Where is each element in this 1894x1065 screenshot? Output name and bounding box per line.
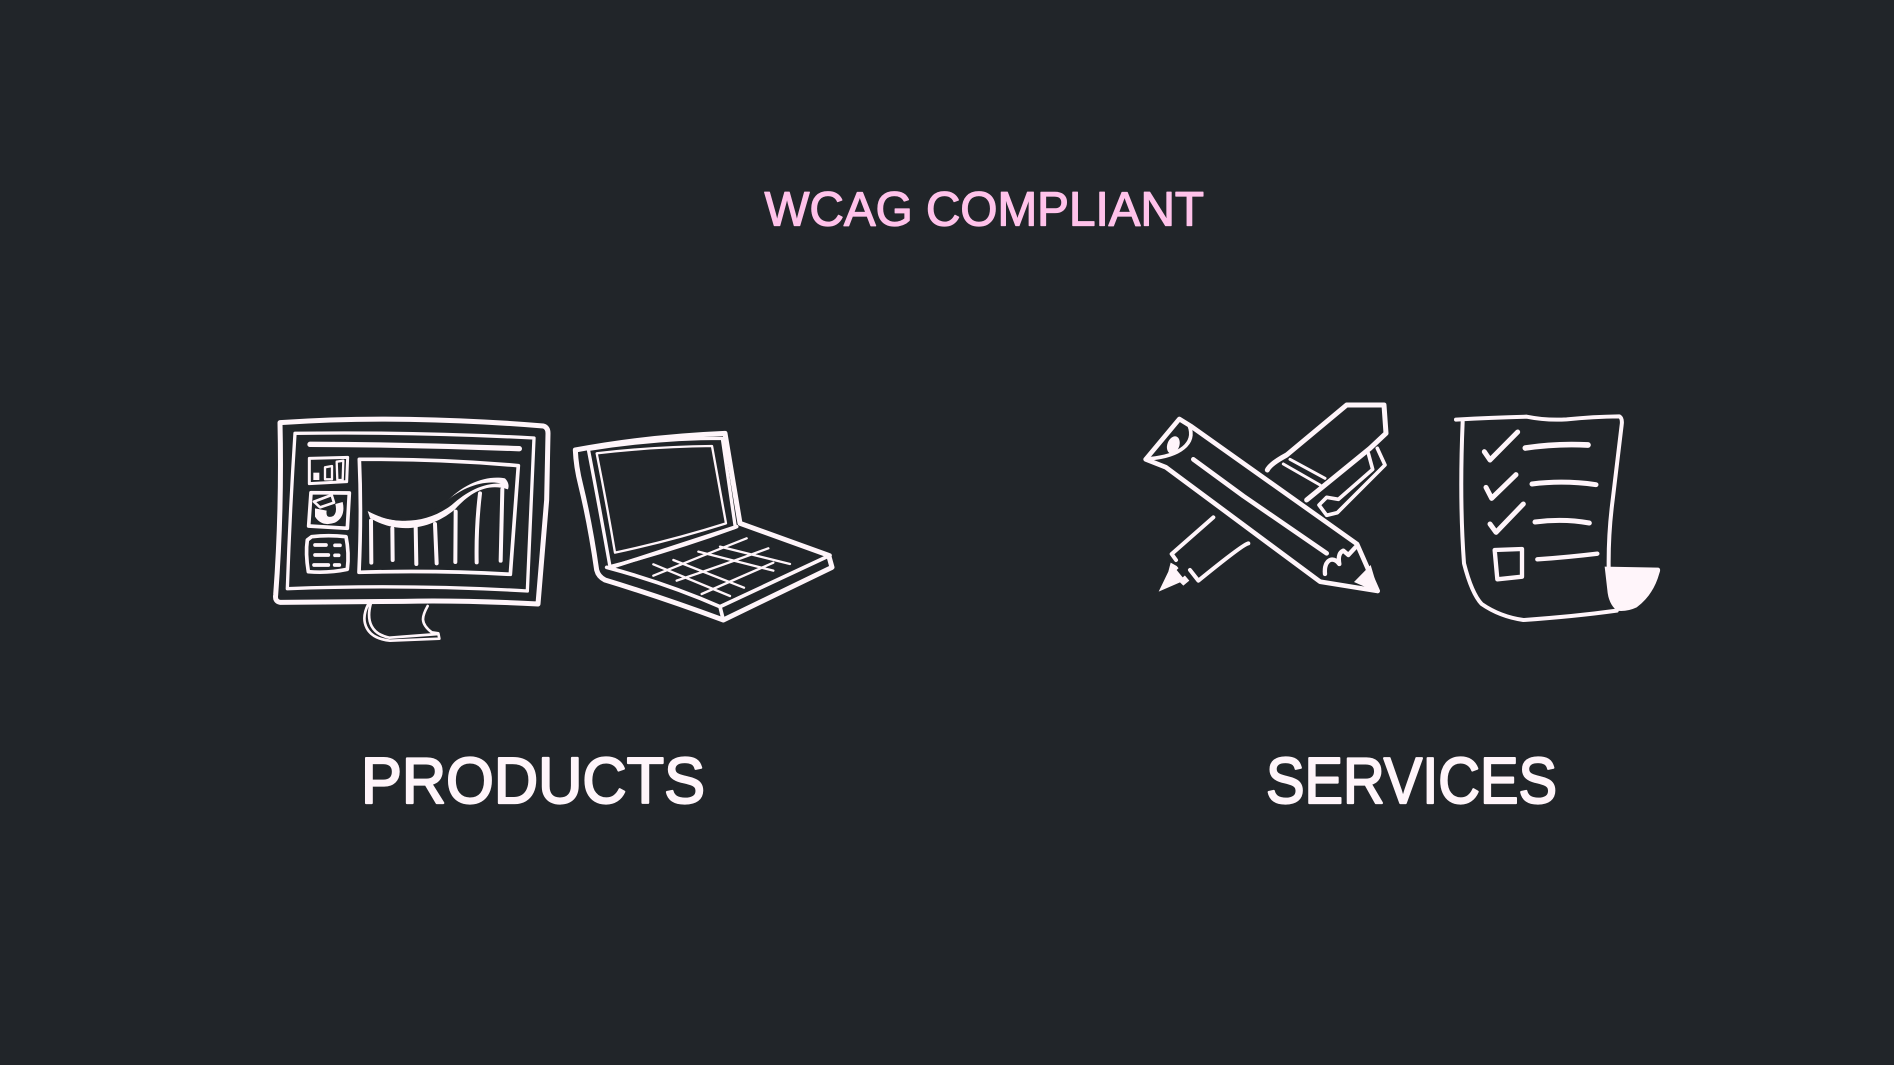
heading: services: SERVICES	[1266, 744, 1557, 817]
pencil	[1146, 419, 1379, 593]
title: WCAG compliant: WCAG COMPLIANT	[764, 182, 1204, 236]
icon: desktop monitor with dashboard	[276, 419, 548, 641]
icon: crossed pencil and marker	[1146, 405, 1386, 593]
icon: checklist document	[1456, 416, 1660, 620]
heading: products: PRODUCTS	[361, 744, 705, 817]
icon: laptop	[575, 433, 832, 620]
marker	[1159, 405, 1386, 592]
